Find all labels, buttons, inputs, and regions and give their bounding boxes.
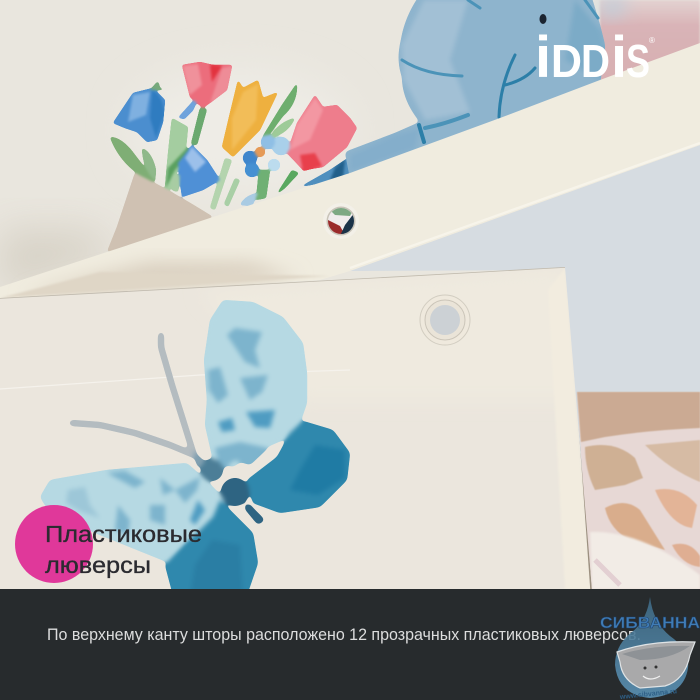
- blue petals at lower edge: [240, 152, 357, 206]
- bluebell lower: [178, 145, 220, 197]
- elephant body: [345, 0, 605, 178]
- icon: pink circle behind heading: [15, 505, 93, 583]
- forget-me-not: [243, 135, 290, 177]
- panel: folded top hem: [0, 43, 700, 298]
- panel: front curtain: [0, 267, 592, 589]
- pink tulip: [287, 95, 357, 171]
- left wing: [40, 463, 225, 562]
- bouquet illustration: [107, 62, 357, 252]
- icon: grommet on back hem: [323, 203, 359, 239]
- logo: iddis: ®: [649, 36, 655, 45]
- right dark wing: [247, 421, 350, 513]
- butterfly body: [192, 450, 265, 525]
- paper cone: [107, 173, 213, 252]
- heading: plastic grommets: [45, 521, 202, 578]
- upper wing: [204, 300, 307, 467]
- watermark bathtub: [617, 642, 695, 688]
- red tulip: [182, 62, 232, 108]
- watermark name: СИБВАННА: [600, 615, 700, 632]
- icon: transparent grommet: [420, 295, 470, 345]
- panel: dark caption band: [0, 589, 700, 700]
- logo: iddis: i: [611, 25, 627, 90]
- panel: back fabric with flowers: [0, 0, 700, 300]
- logo: iddis: i: [535, 25, 551, 90]
- heading: plastic grommets: люверсы: [45, 552, 151, 578]
- caption text: По верхнему канту шторы расположено 12 прозрачных пластиковых люверсов.: [47, 626, 641, 644]
- antennae: [72, 335, 194, 455]
- panel: blue-gray lower curtain: [350, 145, 700, 589]
- logo: iddis: [535, 25, 655, 90]
- wing spots: [66, 328, 275, 535]
- illustration: butterfly: [40, 300, 350, 595]
- yellow tulip: [222, 80, 278, 157]
- heading: plastic grommets: Пластиковые: [45, 521, 202, 547]
- lower dark wing: [165, 500, 258, 595]
- logo: iddis: D: [551, 35, 582, 87]
- hem stitching: [350, 143, 700, 268]
- elephant markings: [402, 0, 598, 142]
- bouquet stems and leaves: [110, 83, 299, 210]
- logo: iddis: D: [581, 35, 610, 87]
- elephant eye: [540, 14, 546, 24]
- bluebell left: [113, 81, 198, 142]
- illustration: blue elephant: [345, 0, 700, 178]
- illustration: giraffe pattern: [577, 392, 700, 589]
- watermark drop: [615, 597, 688, 698]
- watermark: sibvanna: [600, 597, 700, 700]
- logo: iddis: S: [626, 35, 650, 87]
